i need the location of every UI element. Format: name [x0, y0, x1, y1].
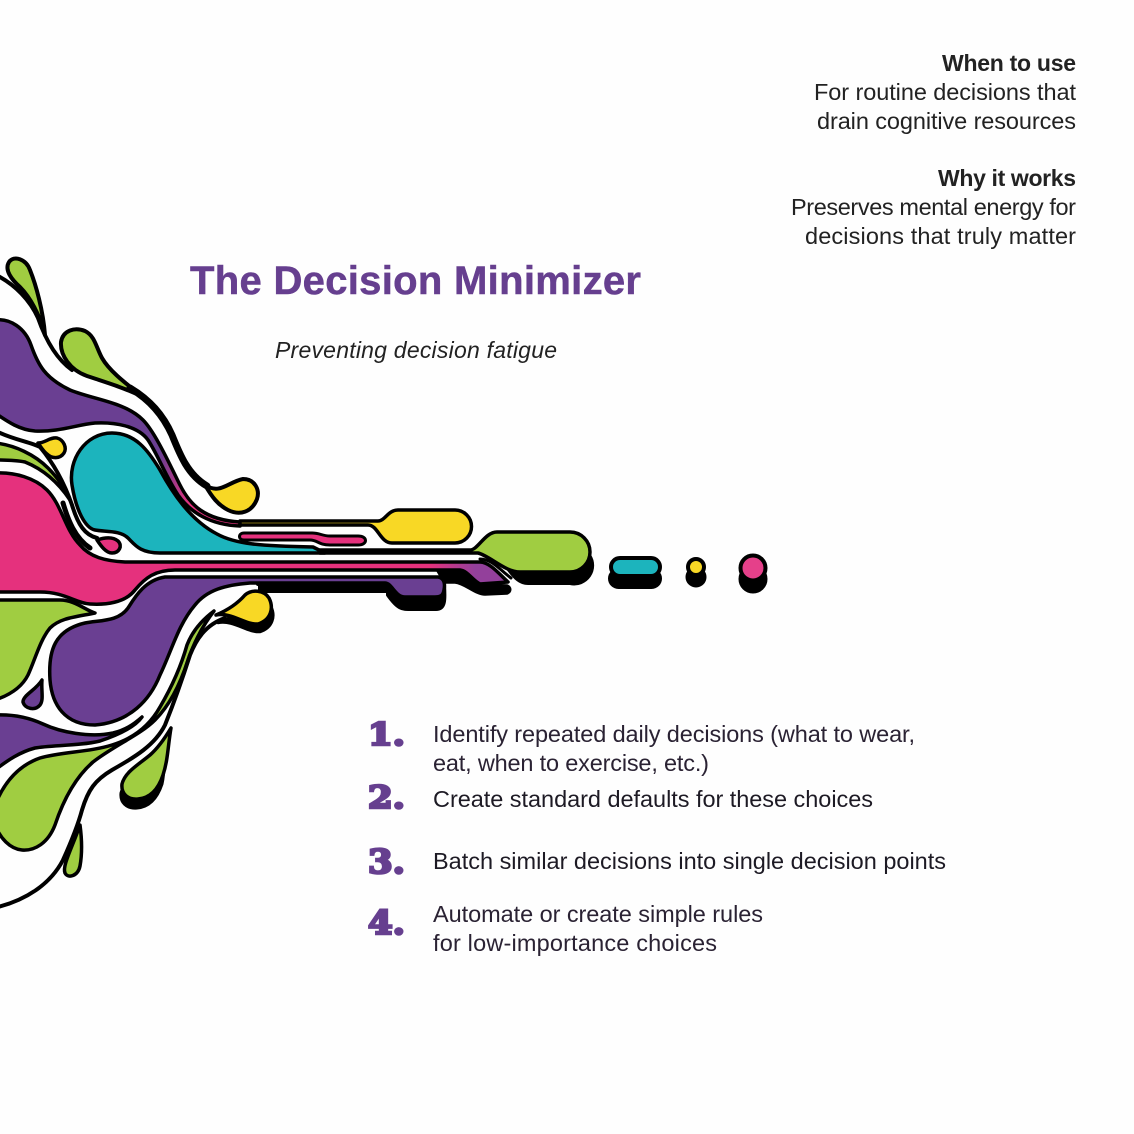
step 4: [368, 901, 763, 956]
small bottom green drop: [64, 825, 82, 876]
when to use block: drain cognitive resources: [817, 108, 1076, 134]
upper left green drop: [7, 259, 45, 335]
left green shape: [0, 600, 95, 700]
central purple shape: [50, 577, 444, 725]
when to use block: [814, 50, 1076, 134]
step 4 text: Automate or create simple rules: [433, 901, 763, 927]
pink dot: [740, 556, 766, 592]
lower purple band: [0, 715, 142, 770]
step 1 text: eat, when to exercise, etc.): [433, 750, 709, 776]
left inner flow line: [63, 503, 90, 548]
mid green drop: [122, 728, 171, 799]
why it works block: Why it works: [938, 165, 1076, 191]
large lower green shape: [0, 611, 214, 850]
title: The Decision Minimizer: [190, 259, 641, 303]
splash graphic: [0, 259, 766, 907]
thick flow line: [130, 388, 207, 486]
lower yellow drop: [216, 591, 271, 624]
why it works block: decisions that truly matter: [805, 223, 1076, 249]
step 1 number: 1.: [368, 717, 405, 753]
green pill shadow: [505, 555, 593, 584]
upper flow line: [0, 276, 72, 370]
when to use block: For routine decisions that: [814, 79, 1076, 105]
center line above pink stripe: [320, 552, 478, 554]
small pink pill: [240, 533, 366, 545]
outer lower flow line: [0, 618, 225, 907]
purple pill shadow: [258, 578, 444, 609]
subtitle: Preventing decision fatigue: [275, 337, 557, 363]
small yellow drop: [38, 438, 65, 458]
lower yellow drop shadow: [218, 599, 273, 632]
green pill: [320, 532, 590, 572]
step 3 text: Batch similar decisions into single decision points: [433, 848, 946, 874]
mid green drop shadow: [121, 747, 165, 808]
step 3: [368, 842, 946, 881]
step 4 text: for low-importance choices: [433, 930, 717, 956]
upper purple shape: [0, 320, 240, 526]
step 2: [368, 780, 873, 816]
left flow line: [0, 432, 97, 538]
upper green drop: [61, 329, 143, 397]
when to use block: When to use: [942, 50, 1076, 76]
teal shape: [71, 433, 325, 553]
step 1 text: Identify repeated daily decisions (what to wear,: [433, 721, 915, 747]
upper yellow drop: [205, 479, 258, 513]
central pink shape: [0, 473, 508, 604]
black band under stripe: [258, 582, 388, 593]
step 2 text: Create standard defaults for these choices: [433, 786, 873, 812]
small purple drop: [23, 680, 42, 709]
yellow dot: [688, 559, 704, 586]
step 4 number: 4.: [368, 903, 405, 942]
teal dot pill: [610, 558, 660, 587]
left green strip: [0, 443, 70, 500]
step 1 text: [433, 721, 915, 776]
step 2 number: 2.: [368, 780, 405, 816]
magenta tip shadow: [437, 571, 511, 595]
small pink drop: [97, 538, 120, 553]
step 3 number: 3.: [368, 842, 405, 881]
step 4 text: [433, 901, 763, 956]
step 1: [368, 717, 915, 776]
outer line around stripe tip: [480, 559, 511, 578]
why it works block: Preserves mental energy for: [791, 194, 1076, 220]
why it works block: [791, 165, 1076, 249]
yellow pill: [240, 510, 472, 543]
